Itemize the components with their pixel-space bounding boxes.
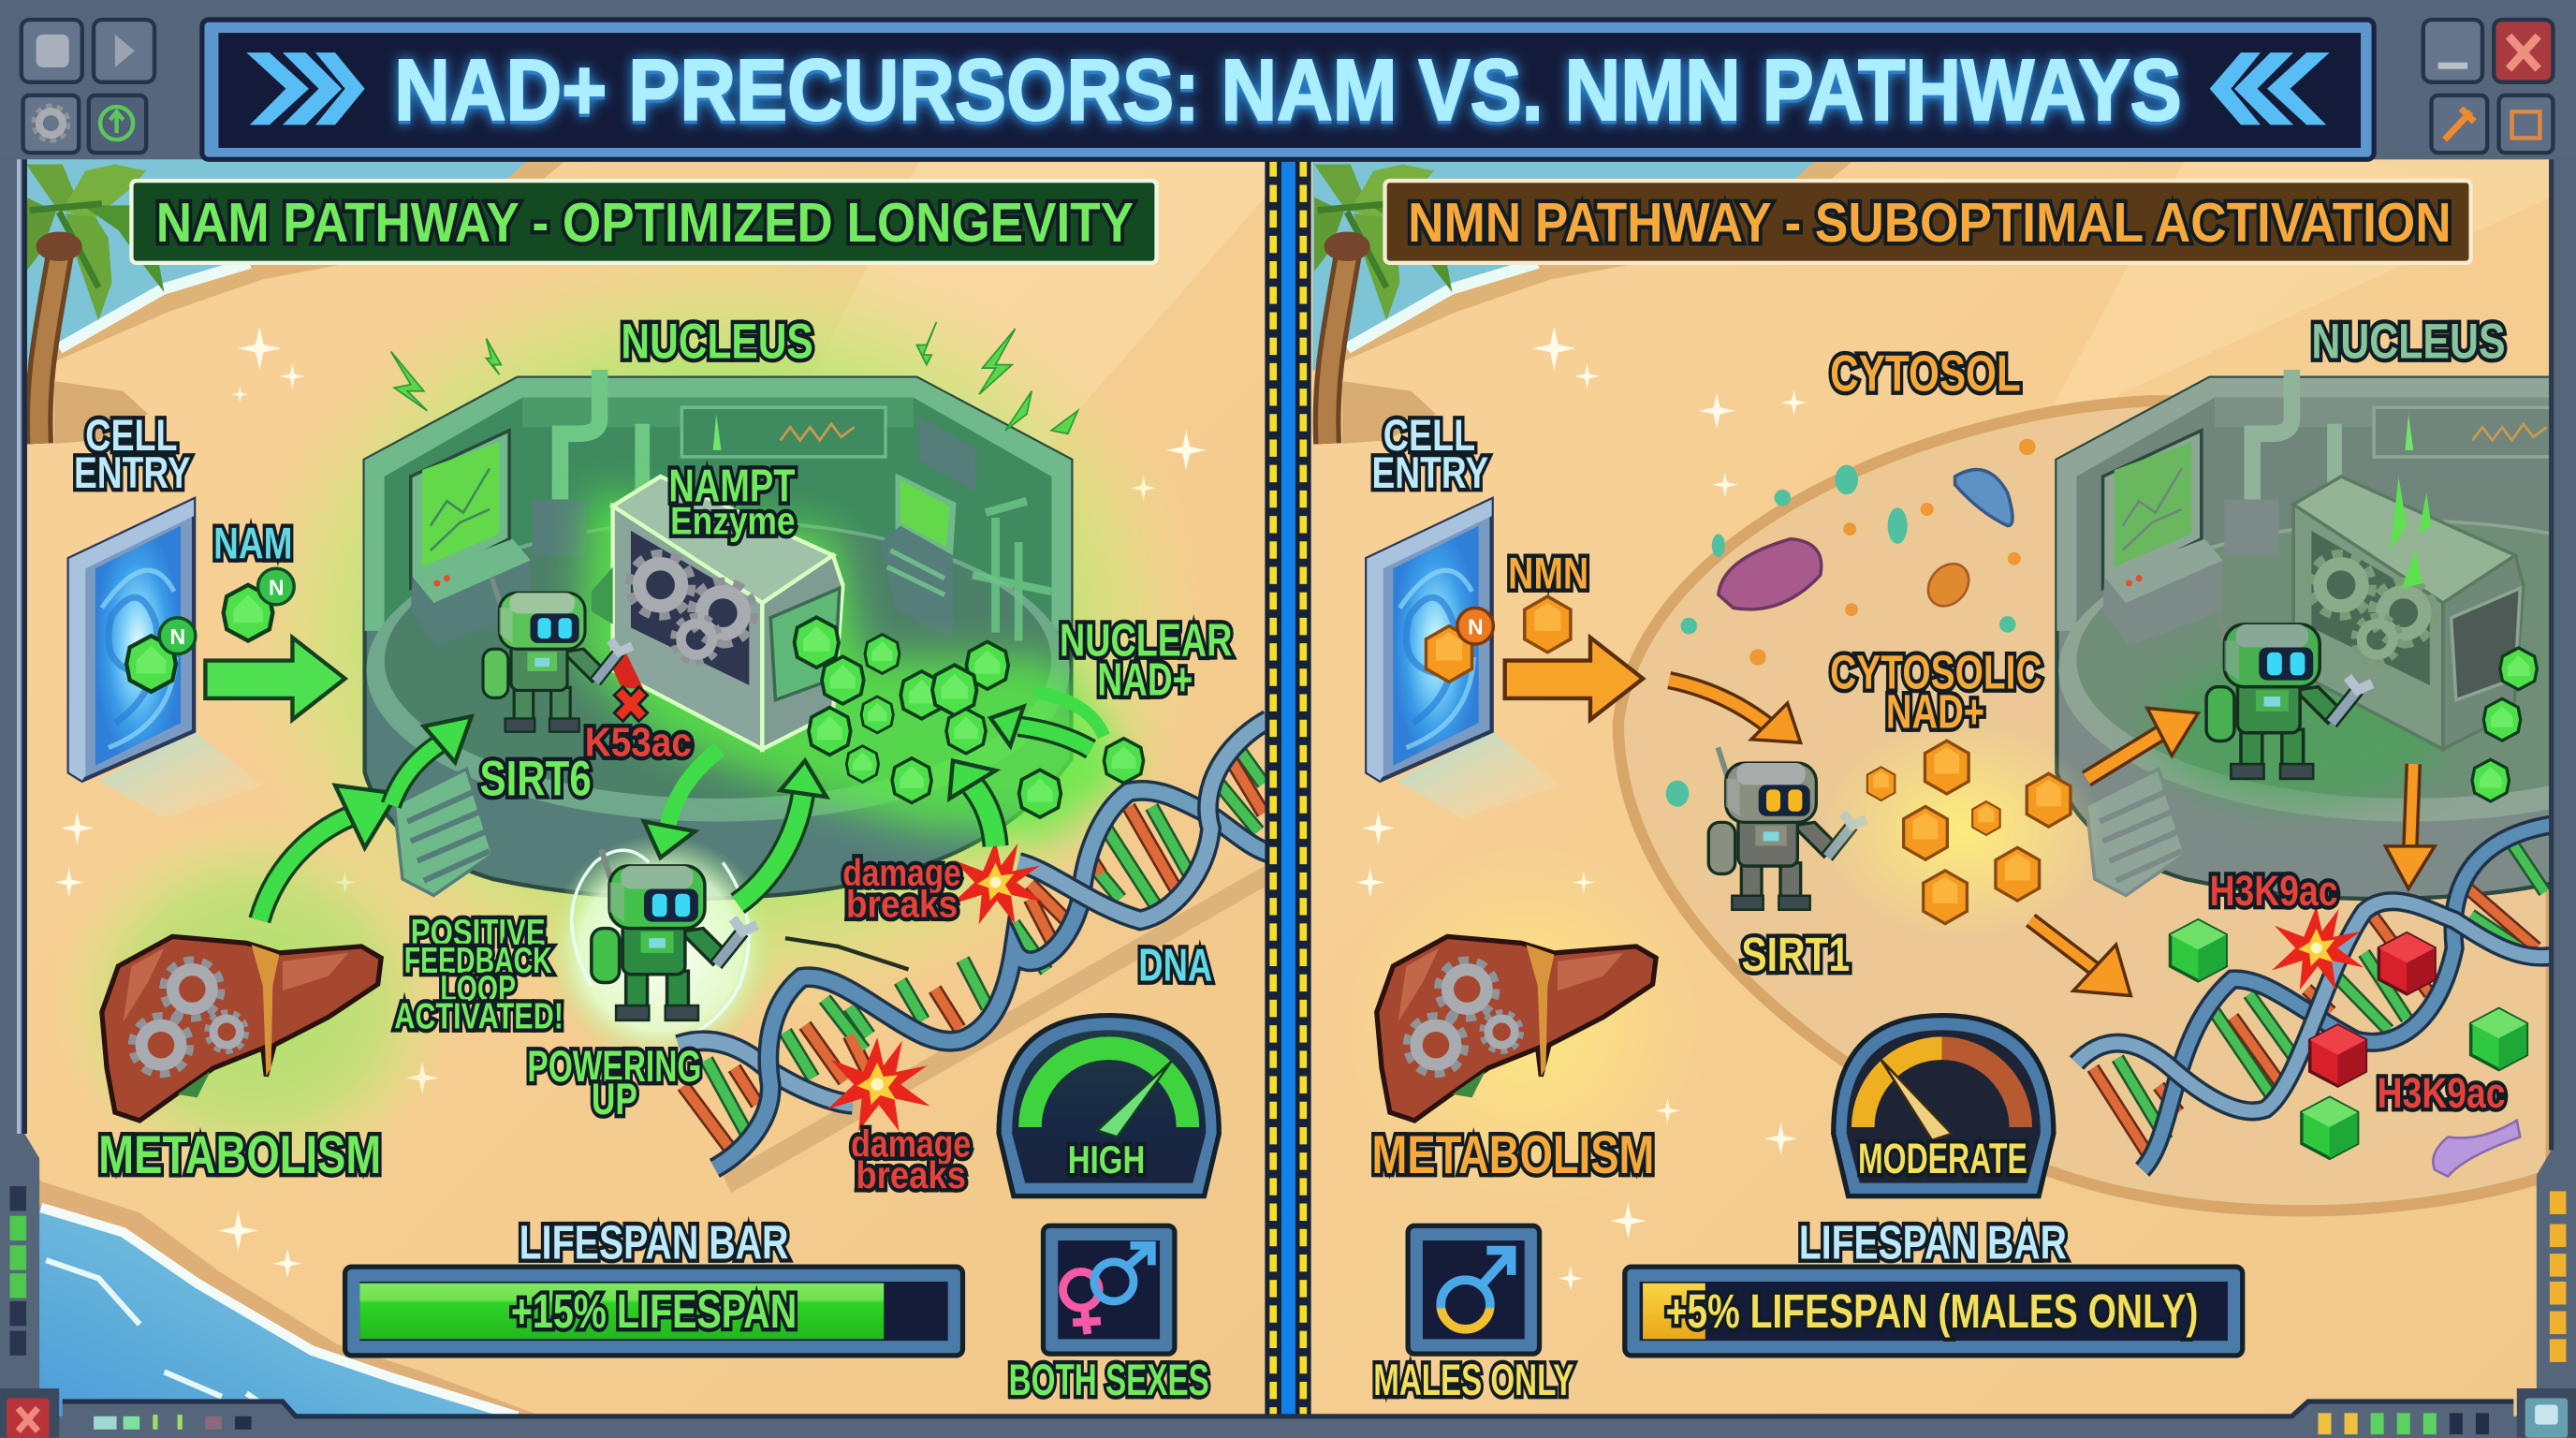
gauge: moderate xyxy=(1834,1016,2054,1196)
label: H3K9ac bottom: H3K9ac xyxy=(2378,1069,2506,1117)
liver: metabolism xyxy=(1377,936,1656,1121)
label: damage breaks upper xyxy=(842,851,961,925)
icon: cell entry portal: N xyxy=(1468,614,1484,638)
cube: green 2 xyxy=(2471,1009,2526,1070)
arrow: metabolism to nucleus xyxy=(259,785,398,920)
arrows: nuclear NAD+ flow xyxy=(990,692,1104,749)
heading: NAM pathway: NAM PATHWAY - OPTIMIZED LONGEVITY xyxy=(156,191,1134,254)
gauge: high xyxy=(999,1016,1219,1196)
arrow: down to DNA xyxy=(2385,764,2435,888)
arrow: loop down to robot xyxy=(644,749,720,858)
label: nuclear NAD+: NUCLEAR xyxy=(1060,615,1232,666)
window chrome: right rail xyxy=(2537,156,2576,1388)
scene: bottom-left shoreline xyxy=(39,1178,535,1416)
green sparks over machine xyxy=(2391,477,2432,588)
label: SIRT6: SIRT6 xyxy=(479,751,592,806)
label: cell entry: ENTRY xyxy=(74,448,191,498)
window chrome: bottom bar xyxy=(0,1401,2576,1438)
damage burst: lower xyxy=(827,1037,930,1131)
center divider xyxy=(1265,159,1311,1416)
glow: nucleus energy xyxy=(271,275,1163,987)
label: cytosolic NAD+: NAD+ xyxy=(1886,684,1984,738)
label: metabolism: METABOLISM xyxy=(98,1125,381,1185)
label: powering up: UP xyxy=(592,1075,637,1124)
label: K53ac: K53ac xyxy=(585,719,692,765)
arrow: to cytosol xyxy=(1669,681,1801,742)
NAMPT machine xyxy=(592,477,842,749)
label: damage breaks lower: damage xyxy=(851,1123,971,1166)
label: cytosol: CYTOSOL xyxy=(1830,345,2021,403)
cube: red 1 xyxy=(2378,933,2435,994)
mitochondrion xyxy=(1955,470,2012,526)
lifespan bar: +5% xyxy=(1625,1267,2243,1356)
arrow: to SIRT6 xyxy=(391,716,472,805)
label: both sexes: BOTH SEXES xyxy=(1009,1356,1209,1405)
label: positive feedback loop xyxy=(394,913,564,1037)
organelles xyxy=(1666,439,2036,807)
icon: K53ac cut mark xyxy=(618,690,644,718)
button: bottom-right chat xyxy=(2517,1388,2576,1438)
glow: liver energy xyxy=(75,837,434,1168)
damage burst: upper xyxy=(951,841,1043,924)
heading: NMN pathway: NMN PATHWAY - SUBOPTIMAL ACTIVATION xyxy=(1408,191,2452,254)
icon: cell entry portal xyxy=(1367,500,1560,818)
icon: NAM molecule xyxy=(224,568,294,640)
label: NAMPT enzyme xyxy=(668,461,795,542)
label: NAM: NAM xyxy=(213,520,292,569)
icon: NMN molecule xyxy=(1525,596,1571,653)
icon: left chevrons xyxy=(246,52,365,125)
label: nuclear NAD+ xyxy=(1060,615,1232,705)
label: lifespan bar: LIFESPAN BAR xyxy=(1799,1215,2067,1269)
title bar xyxy=(202,20,2374,159)
heading: NAM pathway xyxy=(131,181,1157,263)
glow: liver energy xyxy=(1347,846,1708,1208)
DNA strand: damaged helix xyxy=(679,720,1268,1168)
panel: NMN pathway xyxy=(1311,159,2576,1416)
icon: right chevrons xyxy=(2210,52,2330,125)
golgi apparatus xyxy=(1719,539,1822,609)
organelle: purple pancreas shape xyxy=(2433,1121,2520,1177)
damage burst xyxy=(2272,906,2364,990)
glow: green pool under robot xyxy=(2152,657,2448,805)
label: lifespan bar: LIFESPAN BAR xyxy=(520,1215,788,1269)
label: gauge moderate: MODERATE xyxy=(1858,1135,2027,1182)
small bean xyxy=(1920,556,1977,614)
label: powering up xyxy=(527,1042,701,1124)
button: bottom-left close xyxy=(0,1388,59,1438)
label: positive feedback loop: POSITIVE xyxy=(411,913,546,953)
label: nucleus: NUCLEUS xyxy=(621,315,813,370)
arrow: NAM entry xyxy=(205,638,345,720)
label: cell entry: CELL xyxy=(1383,411,1475,461)
title text: NAD+ PRECURSORS: NAM VS. NMN PATHWAYS xyxy=(394,41,2182,139)
NMN enzyme machine, dim xyxy=(2293,477,2524,749)
labels: NAM panel xyxy=(74,315,1232,1405)
DNA ground shadow xyxy=(723,862,1270,1193)
robot: powering up xyxy=(592,849,757,1020)
icon: cell entry portal xyxy=(69,500,263,818)
label: cytosolic NAD+ xyxy=(1830,645,2042,738)
arrow: loop up from robot xyxy=(738,761,827,903)
icon: both sexes xyxy=(1043,1225,1175,1354)
lightning bolts xyxy=(391,322,1077,433)
label: damage breaks upper: breaks xyxy=(846,882,958,925)
icon: cytosolic NAD+ hexagons xyxy=(1867,741,2071,924)
panel: NAM pathway xyxy=(24,159,1270,1421)
label: NMN: NMN xyxy=(1508,549,1588,598)
label: powering up: POWERING xyxy=(527,1042,701,1092)
glow: cytosolic NAD+ xyxy=(1823,723,2103,936)
label: positive feedback loop: LOOP xyxy=(440,969,516,1009)
label: NAMPT enzyme: NAMPT xyxy=(668,461,795,511)
liver: metabolism xyxy=(102,936,381,1121)
sparkles xyxy=(1355,327,1807,1291)
label: cell entry: CELL xyxy=(85,411,178,461)
nucleus machine room xyxy=(365,370,1071,899)
robot: nuclear sirtuin xyxy=(2206,608,2372,779)
cube: green 1 xyxy=(2170,920,2226,981)
label: cell entry: ENTRY xyxy=(1372,448,1488,498)
nucleus machine room, inactive xyxy=(2056,370,2576,899)
label: males only: MALES ONLY xyxy=(1373,1356,1573,1405)
arrow: NMN entry xyxy=(1505,638,1643,720)
scene: tropical sea and palm xyxy=(24,159,567,444)
arrow: DNA repair xyxy=(949,761,996,846)
label: +5% lifespan males only: +5% LIFESPAN (MALES ONLY) xyxy=(1666,1284,2198,1338)
label: damage breaks upper: damage xyxy=(842,851,961,894)
icon: NAM molecule: N xyxy=(269,575,284,599)
label: damage breaks lower xyxy=(851,1123,971,1196)
label: gauge high: HIGH xyxy=(1068,1137,1145,1181)
icon: males only xyxy=(1408,1225,1540,1354)
cube: red 2 xyxy=(2310,1025,2365,1086)
sparkles xyxy=(54,327,1206,1278)
label: nuclear NAD+: NAD+ xyxy=(1097,654,1193,705)
window chrome: left rail xyxy=(0,156,39,1388)
label: cell entry xyxy=(1372,411,1488,498)
label: positive feedback loop: ACTIVATED! xyxy=(394,997,564,1037)
icon: NAD+ hexagon cluster xyxy=(795,617,1144,817)
heading: NMN pathway xyxy=(1385,181,2471,263)
label: cytosolic NAD+: CYTOSOLIC xyxy=(1830,645,2042,698)
cytosol specks xyxy=(1666,465,2016,807)
buttons: top-left controls xyxy=(22,20,154,153)
icon: K53ac cut mark fill xyxy=(620,692,642,716)
label: DNA: DNA xyxy=(1138,941,1212,991)
label: cell entry xyxy=(74,411,191,498)
label: metabolism: METABOLISM xyxy=(1372,1125,1654,1185)
glow: powered robot aura xyxy=(552,838,766,1057)
DNA strand: histone-blocked helix xyxy=(2076,825,2552,1170)
labels: NMN panel xyxy=(1372,315,2506,1405)
robot: SIRT1 xyxy=(1708,747,1866,910)
label: H3K9ac top: H3K9ac xyxy=(2210,867,2338,915)
arrow: to nucleus xyxy=(2086,708,2198,779)
cytosol region xyxy=(1618,401,2552,1211)
cube: green 3 xyxy=(2302,1097,2358,1158)
icon: nuclear NAD+ hexagons xyxy=(2472,648,2537,801)
label: damage breaks lower: breaks xyxy=(856,1153,966,1196)
scene: sea and palm xyxy=(1312,159,1855,444)
label: NAMPT enzyme: Enzyme xyxy=(670,498,795,542)
label: SIRT1: SIRT1 xyxy=(1741,928,1850,981)
glow around NAMPT enzyme and NAD+ xyxy=(575,493,1134,838)
label: +15% lifespan: +15% LIFESPAN xyxy=(511,1284,797,1338)
arrow: to DNA xyxy=(2030,920,2130,996)
label: nucleus: NUCLEUS xyxy=(2311,315,2506,370)
icon: cell entry portal: N xyxy=(170,624,185,649)
label: positive feedback loop: FEEDBACK xyxy=(404,941,552,981)
electric arcs around robot xyxy=(572,850,749,1035)
buttons: top-right controls xyxy=(2423,20,2553,153)
robot: SIRT6 xyxy=(483,578,633,732)
lifespan bar: +15% xyxy=(345,1267,962,1356)
